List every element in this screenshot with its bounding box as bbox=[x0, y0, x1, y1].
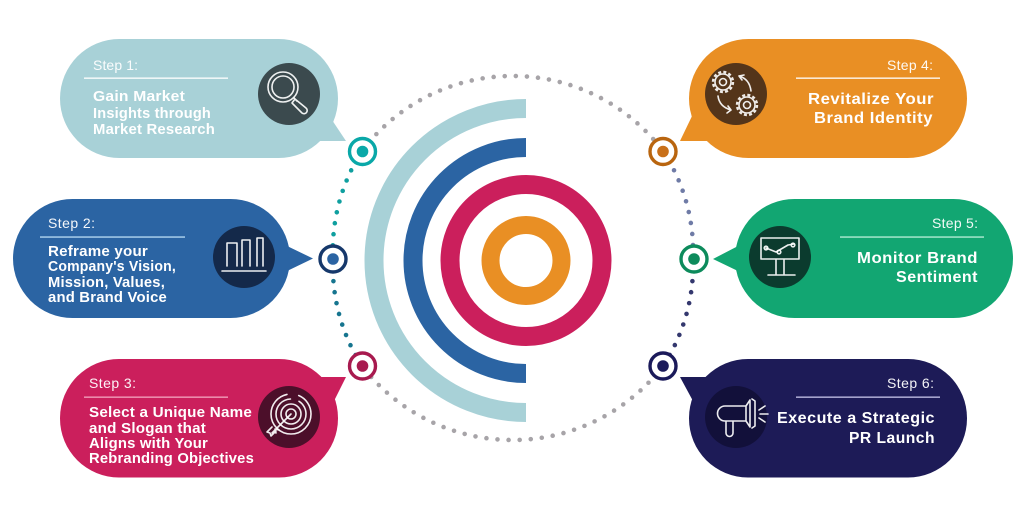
node: step 1 marker bbox=[350, 138, 376, 164]
icon: bar chart bbox=[213, 226, 275, 288]
heading: step 6 title: Execute a Strategic bbox=[777, 410, 935, 427]
panel: step 5: Step 5: bbox=[932, 215, 978, 231]
heading: step 3 title: Aligns with Your bbox=[89, 436, 208, 452]
heading: step 1 title: Insights through bbox=[93, 106, 211, 122]
panel: step 3: Step 3: bbox=[89, 375, 136, 391]
icon: monitor with line chart bbox=[749, 226, 811, 288]
heading: step 3 title: Select a Unique Name bbox=[89, 405, 252, 421]
panel: step 1: Step 1: bbox=[93, 57, 138, 73]
panel: step 1 bbox=[60, 39, 346, 158]
panel: step 5 bbox=[713, 199, 1013, 318]
heading: step 2 title: Company's Vision, bbox=[48, 259, 176, 275]
icon: target with arrow bbox=[258, 386, 320, 448]
heading: step 2 title: Mission, Values, bbox=[48, 275, 165, 291]
heading: step 3 title: Rebranding Objectives bbox=[89, 451, 254, 467]
panel: step 6: Step 6: bbox=[887, 375, 934, 391]
heading: step 5 title bbox=[857, 250, 978, 286]
heading: step 5 title: Sentiment bbox=[896, 269, 978, 286]
heading: step 3 title: and Slogan that bbox=[89, 421, 206, 437]
heading: step 4 title: Brand Identity bbox=[814, 110, 933, 127]
panel: step 6 bbox=[680, 359, 967, 478]
central concentric half rings bbox=[374, 108, 602, 413]
panel: step 2 bbox=[13, 199, 313, 318]
heading: step 1 title: Market Research bbox=[93, 122, 215, 138]
heading: step 2 title bbox=[48, 244, 176, 306]
panel: step 2: Step 2: bbox=[48, 215, 95, 231]
dotted circle connecting the steps bbox=[333, 76, 693, 440]
heading: step 4 title: Revitalize Your bbox=[808, 91, 934, 108]
panel: step 4: Step 4: bbox=[887, 57, 933, 73]
heading: step 6 title bbox=[777, 410, 935, 447]
panel: step 3 bbox=[60, 359, 346, 478]
heading: step 1 title: Gain Market bbox=[93, 89, 185, 105]
node: step 3 marker bbox=[350, 353, 376, 379]
heading: step 4 title bbox=[808, 91, 934, 127]
heading: step 1 title bbox=[93, 89, 215, 138]
heading: step 6 title: PR Launch bbox=[849, 430, 935, 447]
heading: step 5 title: Monitor Brand bbox=[857, 250, 978, 267]
heading: step 2 title: Reframe your bbox=[48, 244, 148, 260]
icon: gears with cycle arrows bbox=[705, 63, 767, 125]
node: step 4 marker bbox=[650, 138, 676, 164]
heading: step 2 title: and Brand Voice bbox=[48, 290, 167, 306]
icon: magnifying glass bbox=[258, 63, 320, 125]
node: step 6 marker bbox=[650, 353, 676, 379]
panel: step 4 bbox=[680, 39, 967, 158]
node: step 2 marker bbox=[320, 246, 346, 272]
node: step 5 marker bbox=[681, 246, 707, 272]
heading: step 3 title bbox=[89, 405, 254, 467]
icon: megaphone bbox=[705, 386, 768, 448]
